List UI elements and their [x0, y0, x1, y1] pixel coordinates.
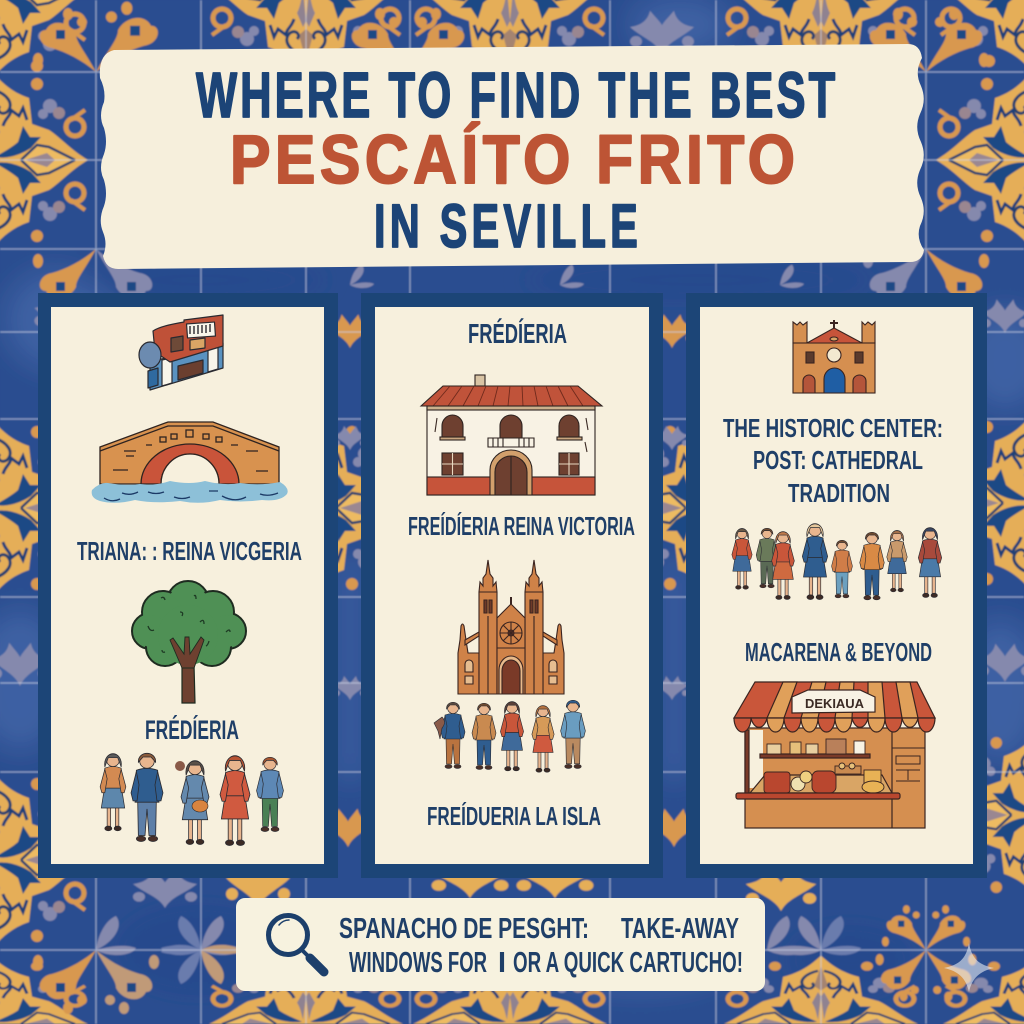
title line 1: WHERE TO FIND THE BEST	[196, 59, 835, 131]
icon: magnifying glass	[268, 916, 324, 972]
label: historic center text: POST: CATHEDRAL	[753, 445, 923, 475]
people group	[732, 524, 942, 600]
icon: Triana bridge	[92, 422, 288, 503]
icon: sparkle watermark	[944, 943, 994, 992]
label: historic center text: TRADITION	[788, 478, 890, 508]
title line 3: IN SEVILLE	[374, 193, 638, 261]
icon: market stall	[734, 682, 935, 828]
panel: Freiduerias	[361, 293, 663, 878]
icon: tree	[132, 581, 246, 703]
label: Triana: TRIANA: : REINA VICGERIA	[77, 536, 302, 566]
label: Freídueria La Isla: FREÍDUERIA LA ISLA	[427, 801, 601, 831]
title banner	[100, 44, 924, 269]
tip text: OR A QUICK CARTUCHO!	[513, 947, 743, 979]
icon: fried fish shop	[139, 315, 223, 390]
icon: church	[793, 320, 875, 393]
label: historic center text	[723, 413, 943, 508]
tip text: TAKE-AWAY	[621, 913, 739, 945]
icon: gothic cathedral	[458, 560, 564, 694]
tip text: I	[498, 947, 506, 979]
tip text: SPANACHO DE PESGHT:	[339, 913, 589, 945]
tip text	[339, 913, 743, 979]
people group	[100, 753, 283, 845]
label: historic center text: THE HISTORIC CENTER:	[723, 413, 943, 443]
tip text: WINDOWS FOR	[349, 947, 487, 979]
label: Frédíeria heading: FRÉDÍERIA	[468, 318, 567, 349]
panel: Historic Center and Macarena	[686, 293, 987, 878]
label: Frédíeria: FRÉDÍERIA	[145, 714, 239, 745]
panel: Triana	[38, 293, 338, 878]
callout: tip plate	[236, 898, 765, 991]
people group	[434, 700, 585, 772]
icon: white house with tiled roof	[421, 375, 602, 495]
label: Freídíeria Reina Victoria: FREÍDÍERIA REINA VICTORIA	[408, 511, 635, 541]
stall sign text: DEKIAUA	[805, 696, 865, 711]
title line 2: PESCAÍTO FRITO	[230, 120, 795, 198]
